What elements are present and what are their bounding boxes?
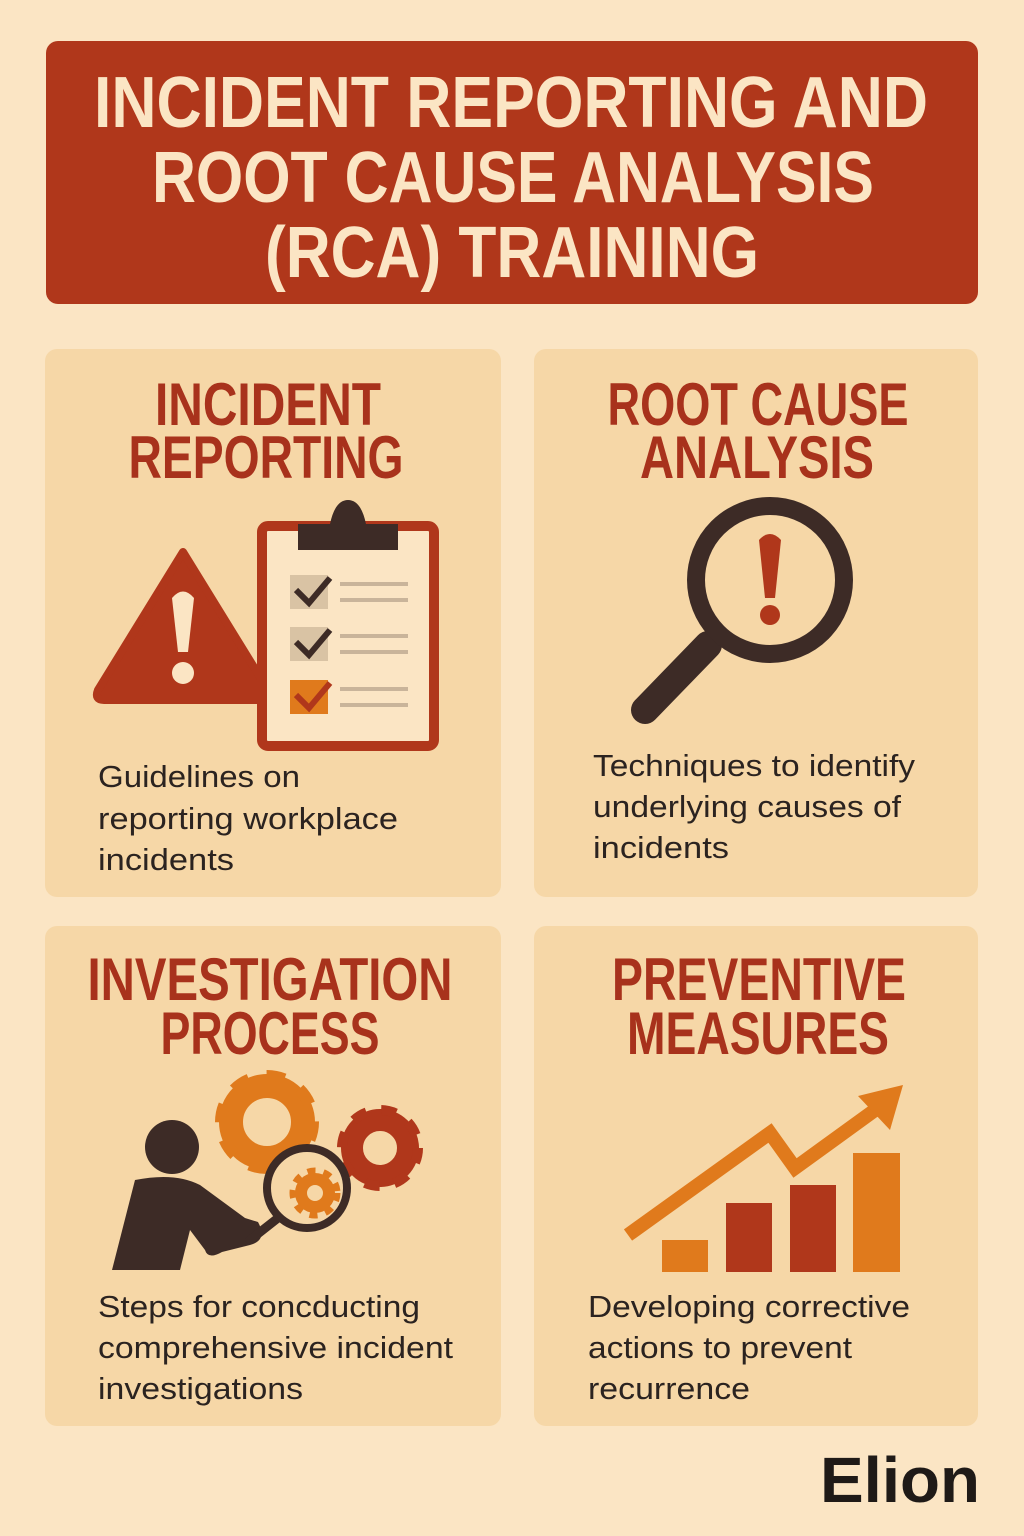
text: incident reporting description: Guidelines on [98,759,300,794]
panel: root cause analysis [534,349,978,897]
text: incident reporting description: incidents [98,842,234,877]
text: rca description: Techniques to identify [593,748,916,783]
heading: root cause analysis: ROOT CAUSE [608,371,908,438]
text: preventive description: recurrence [588,1371,750,1406]
icon: magnifier with exclamation [645,506,844,710]
text: investigation description: investigations [98,1371,303,1406]
heading: investigation process: PROCESS [160,1000,380,1067]
text: preventive description: Developing corrective [588,1289,910,1324]
heading: root cause analysis [608,371,908,491]
heading: investigation process: INVESTIGATION [88,946,452,1013]
text: investigation description: comprehensive incident [98,1330,453,1365]
text: investigation description [98,1289,453,1406]
heading: incident reporting: REPORTING [128,424,404,491]
title banner: ROOT CAUSE ANALYSIS [152,138,874,218]
panel: investigation process [45,926,501,1426]
icon: person with gears and magnifier [112,1076,418,1270]
panel: incident reporting [45,349,501,897]
heading: preventive measures: MEASURES [627,1000,889,1067]
icon: clipboard [262,500,434,746]
text: rca description [593,748,916,865]
text: preventive description [588,1289,910,1406]
panel: preventive measures [534,926,978,1426]
icon: bar chart with rising arrow [628,1085,903,1272]
text: rca description: underlying causes of [593,789,901,824]
title banner: (RCA) TRAINING [265,213,759,293]
text: preventive description: actions to prevent [588,1330,852,1365]
heading: root cause analysis: ANALYSIS [640,424,874,491]
heading: investigation process [88,946,452,1067]
text: investigation description: Steps for concducting [98,1289,420,1324]
title banner [46,41,978,304]
icon: warning triangle [97,552,269,700]
heading: incident reporting: INCIDENT [155,371,381,438]
heading: incident reporting [128,371,404,491]
heading: preventive measures [612,946,906,1067]
text: incident reporting description: reporting workplace [98,801,398,836]
text: rca description: incidents [593,830,729,865]
logo: Elion: Elion [820,1444,980,1516]
text: incident reporting description [98,759,398,877]
heading: preventive measures: PREVENTIVE [612,946,906,1013]
